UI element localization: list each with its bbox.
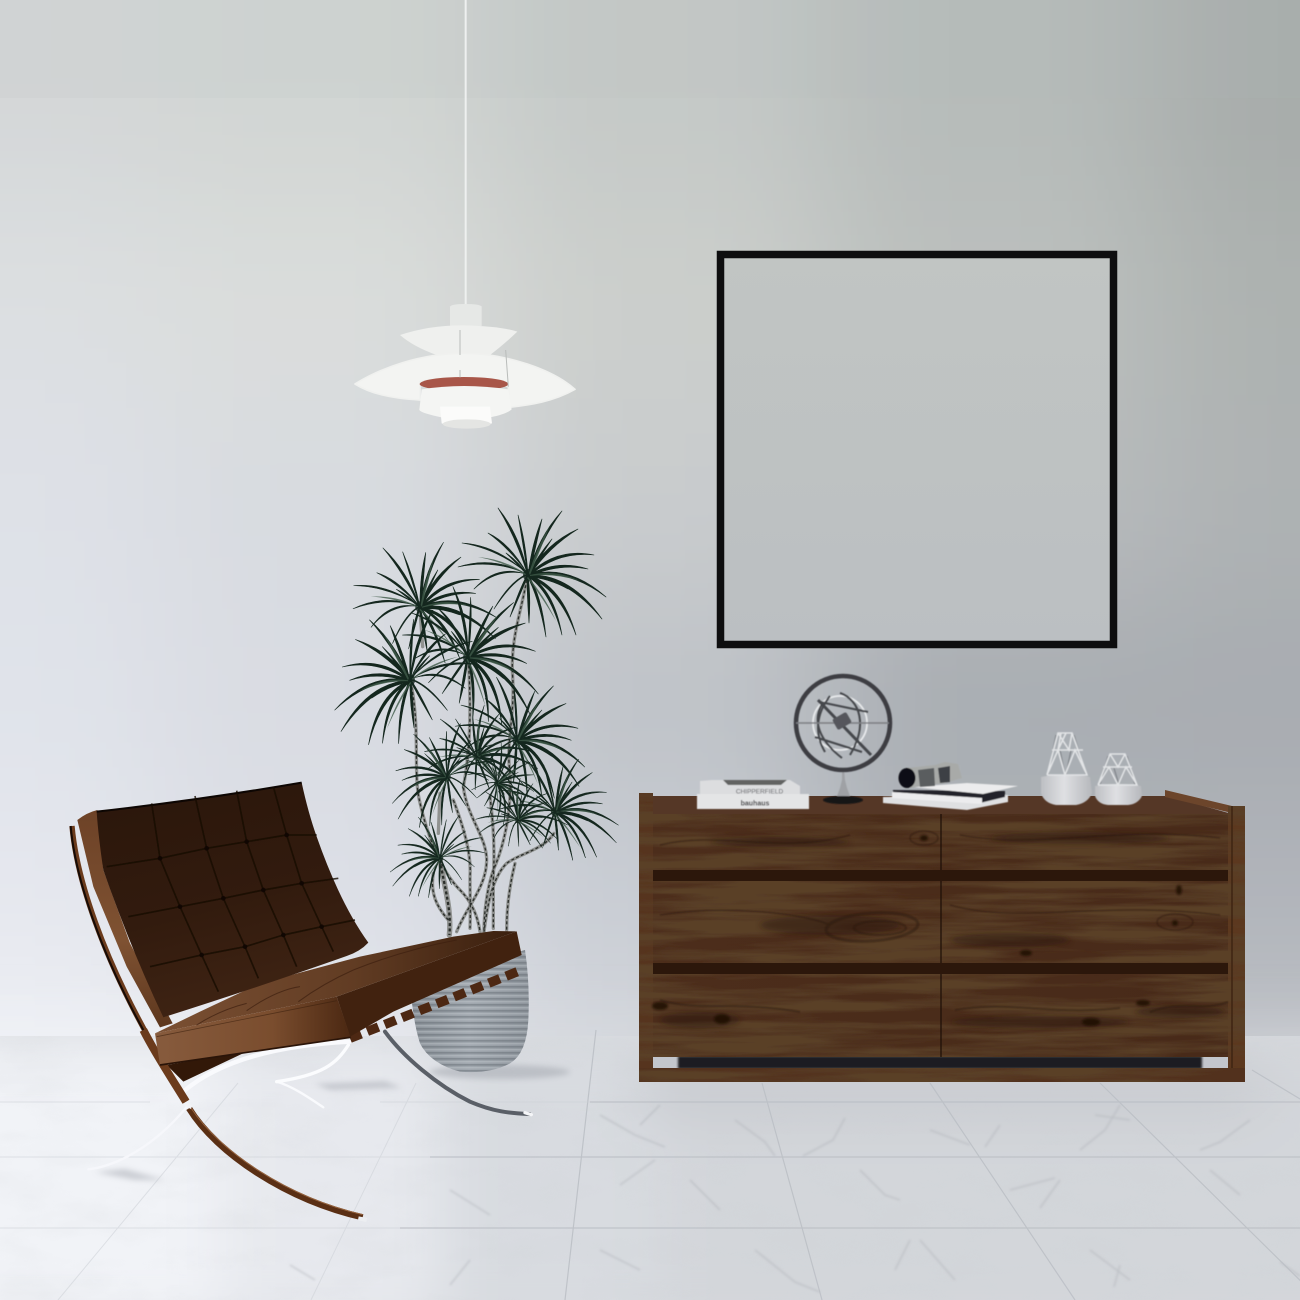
dresser left post: [639, 793, 653, 1082]
plant foliage: [325, 508, 621, 898]
book title: bauhaus: bauhaus: [741, 800, 769, 808]
small bowl: [1095, 784, 1142, 805]
globe core: [832, 712, 852, 730]
lamp cord: [465, 0, 467, 307]
wood dark patches: [660, 832, 1225, 1028]
globe outer ring: [796, 676, 890, 770]
globe inner sphere: [813, 696, 867, 750]
lower book: [697, 794, 809, 809]
books stack right: [883, 762, 1018, 810]
dresser bottom rail: [639, 1068, 1245, 1082]
large wire cage shadow: [1048, 735, 1086, 775]
chair seat straps: [350, 970, 522, 1038]
small wire cage: [1098, 754, 1137, 785]
chair tufting seams: [107, 787, 355, 992]
globe stand: [837, 768, 850, 796]
dresser drawer recess bottom: [653, 963, 1228, 974]
dresser drawer recess top: [653, 870, 1228, 881]
rolled magazine: [907, 762, 962, 788]
chair under-seat dark panel: [167, 1052, 247, 1082]
dresser shadow slot: [678, 1056, 1202, 1069]
chair back cushion: [97, 783, 368, 1017]
large wire cage: [1047, 733, 1087, 775]
marble floor: [0, 1030, 1300, 1300]
lamp upper shade: [400, 325, 517, 355]
wood knots and swirls: [660, 831, 1228, 1012]
chair tufting buttons: [158, 833, 324, 957]
lower magazine: [883, 795, 1008, 810]
faint left tile joints: [0, 1083, 590, 1300]
chair floor shadows: [95, 1081, 402, 1180]
armillary globe: [796, 676, 890, 804]
dark book: [893, 790, 1005, 803]
dresser rear right rail: [1165, 790, 1232, 813]
lounge chair: [71, 783, 531, 1220]
drawers: [652, 814, 1228, 1057]
plant pot: [410, 950, 529, 1072]
chair rear chrome legs: [88, 1032, 531, 1169]
middle magazine: [892, 792, 982, 804]
large bowl: [1041, 774, 1092, 805]
books stack left: [697, 780, 809, 809]
chair seat cushion: [155, 931, 522, 1065]
dresser right post: [1228, 806, 1245, 1082]
floor marble veins: [290, 1105, 1300, 1292]
globe base: [823, 796, 863, 804]
open magazine: [912, 783, 1018, 794]
lamp canopy: [450, 304, 482, 326]
pendant lamp: [355, 0, 575, 429]
dresser floor gap background: [653, 1056, 1229, 1070]
lamp lower shade: [355, 353, 575, 407]
dresser top surface: [650, 796, 1232, 814]
picture frame: [720, 254, 1114, 644]
plant: [325, 508, 621, 935]
book cover image: [723, 780, 787, 785]
large wire vase: [1041, 733, 1092, 805]
chair back side: [77, 810, 173, 1027]
ceiling band: [0, 0, 1300, 98]
small wire cage shadow: [1100, 756, 1135, 785]
small wire vase: [1095, 754, 1142, 805]
pot shadow: [430, 1065, 570, 1079]
plant trunks: [412, 580, 554, 935]
upper book: [700, 780, 800, 794]
lamp lower bowl: [419, 386, 512, 417]
lamp red reflector ring: [420, 377, 508, 391]
tile joints: [400, 1030, 1300, 1300]
dresser: [639, 790, 1245, 1082]
chair main frame: [71, 826, 367, 1220]
book title: Chipperfield: CHIPPERFIELD: [736, 788, 783, 796]
